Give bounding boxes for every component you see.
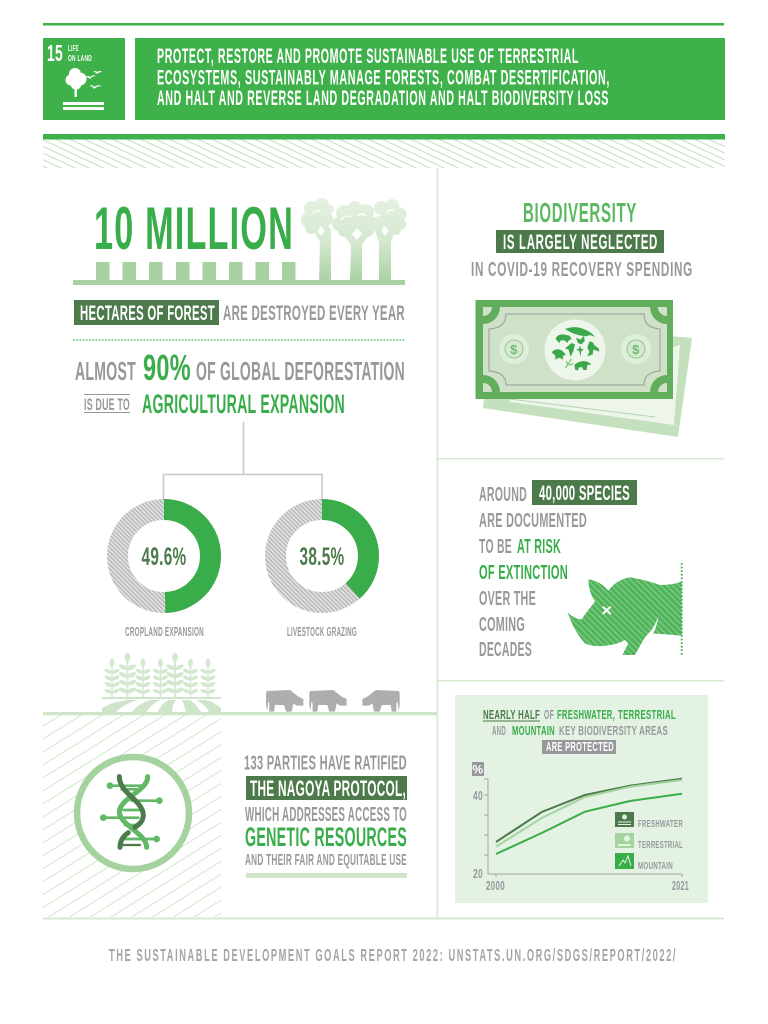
chart heading: KEY BIODIVERSITY AREAS	[559, 723, 668, 738]
text: species at risk: OVER THE	[479, 588, 536, 610]
text: WHICH ADDRESSES ACCESS TO	[245, 804, 407, 826]
90% deforestation statement: ALMOST	[75, 356, 136, 386]
90% deforestation statement: AGRICULTURAL EXPANSION	[142, 389, 345, 419]
text: species at risk: TO BE	[479, 536, 512, 558]
coin left: $	[510, 342, 518, 357]
chart heading: OF	[544, 707, 554, 722]
green band with hatch	[43, 134, 725, 168]
text: species at risk: AT RISK	[517, 536, 561, 558]
text: species at risk: AROUND	[479, 484, 527, 506]
10 million headline: 10 MILLION	[94, 195, 294, 262]
line chart: 20	[473, 867, 483, 881]
medallion with species silhouettes	[544, 320, 606, 380]
crowns	[304, 201, 320, 217]
heading: biodiversity neglected: BIODIVERSITY	[523, 197, 637, 228]
text: species at risk: DECADES	[479, 639, 532, 661]
line chart	[472, 762, 689, 893]
donut: livestock grazing: 38.5%	[300, 543, 344, 571]
90% deforestation statement: 90%	[143, 347, 191, 388]
90% deforestation statement: OF GLOBAL DEFORESTATION	[196, 356, 405, 386]
icon: forest and stumps	[73, 198, 406, 285]
chart heading: MOUNTAIN	[512, 723, 555, 738]
donut: livestock grazing	[276, 510, 368, 639]
chart heading: TERRESTRIAL	[618, 707, 676, 722]
hectares statement: ARE DESTROYED EVERY YEAR	[223, 302, 405, 325]
text: Nagoya Protocol: GENETIC RESOURCES	[245, 822, 407, 852]
text: Nagoya Protocol: AND THEIR FAIR AND EQUITABLE USE	[245, 852, 407, 869]
icon: grazing cows	[266, 690, 400, 712]
icon: rhino	[568, 563, 682, 655]
panel: protected areas chart	[455, 695, 708, 903]
coin right	[621, 334, 651, 364]
text: species at risk: OF EXTINCTION	[479, 562, 568, 584]
hectares statement: HECTARES OF FOREST	[80, 302, 215, 325]
donut: cropland expansion	[118, 510, 210, 639]
text: Nagoya Protocol: THE NAGOYA PROTOCOL,	[250, 776, 406, 801]
legend: MOUNTAIN	[638, 860, 673, 872]
text: species at risk: ARE DOCUMENTED	[479, 510, 587, 532]
banner: goal statement	[135, 38, 725, 120]
line chart: 40	[473, 789, 483, 803]
text: Nagoya Protocol: 133 PARTIES HAVE RATIFIED	[244, 752, 407, 774]
90% deforestation statement: IS DUE TO	[84, 395, 130, 414]
icon: tree and birds	[63, 68, 104, 110]
donut: cropland expansion: CROPLAND EXPANSION	[125, 624, 204, 639]
SDG 15 tile: ON LAND	[68, 53, 92, 63]
panel: lower left hatch	[43, 715, 221, 917]
coin left	[499, 334, 529, 364]
text: Nagoya Protocol	[244, 752, 407, 878]
SDG 15 tile: 15	[47, 40, 63, 66]
text: species at risk: COMING	[479, 614, 525, 636]
90% deforestation statement	[75, 347, 405, 419]
line chart: 2000	[486, 879, 505, 893]
icon: banknotes with species	[476, 300, 692, 437]
donut: livestock grazing: LIVESTOCK GRAZING	[287, 624, 357, 639]
legend: FRESHWATER	[638, 818, 683, 830]
connector	[164, 422, 322, 499]
chart heading: NEARLY HALF	[483, 707, 540, 722]
front banknote	[476, 300, 673, 399]
donut: cropland expansion: 49.6%	[142, 543, 186, 571]
chart heading	[483, 707, 676, 754]
chart heading: AND	[492, 723, 506, 738]
text: species at risk	[479, 480, 637, 661]
legend	[615, 812, 683, 872]
legend: TERRESTRIAL	[638, 839, 683, 851]
back banknote	[483, 320, 692, 437]
coin right: $	[632, 342, 640, 357]
line chart: %	[472, 762, 484, 776]
chart heading: FRESHWATER,	[557, 707, 615, 722]
heading: biodiversity neglected	[471, 197, 693, 281]
chart heading: ARE PROTECTED	[546, 739, 614, 754]
SDG 15 tile	[43, 38, 125, 120]
text: species at risk: 40,000 SPECIES	[539, 482, 630, 505]
icon: wheat field	[102, 653, 221, 712]
hectares statement	[74, 300, 405, 325]
line chart: 2021	[672, 879, 689, 893]
icon: DNA in circle	[77, 757, 189, 869]
top rule	[43, 23, 724, 26]
SDG 15 tile: LIFE	[68, 43, 79, 53]
